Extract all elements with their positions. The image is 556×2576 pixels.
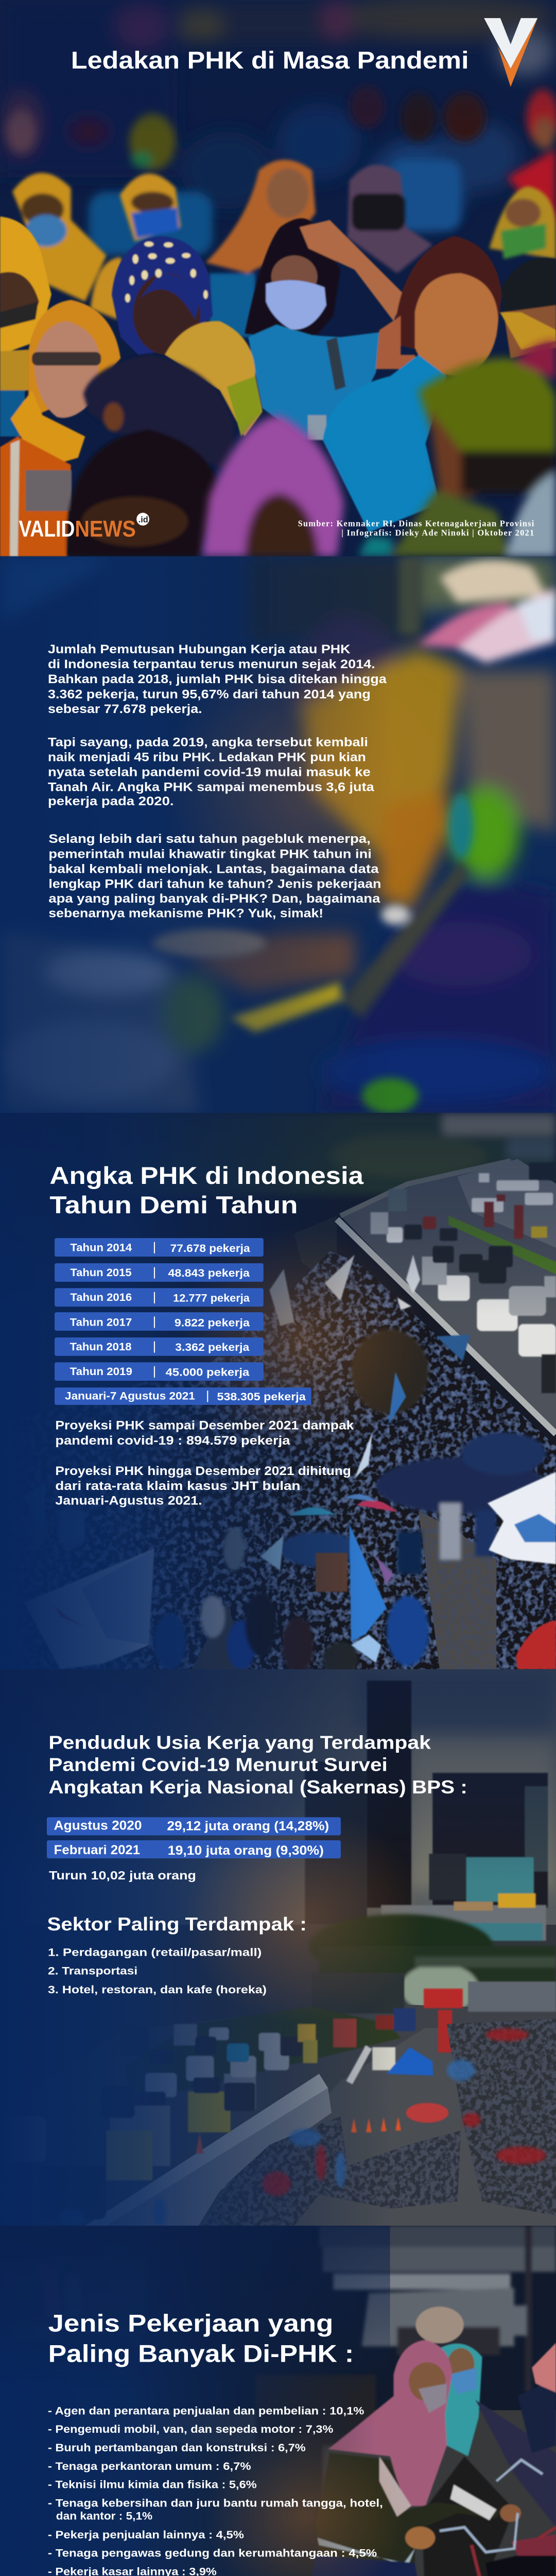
row: 2018: 3.362 pekerja — [175, 1341, 249, 1353]
heading: survey: Penduduk Usia Kerja yang Terdampak — [48, 1732, 431, 1753]
intro paragraph 2: naik menjadi 45 ribu PHK. Ledakan PHK pun kian — [48, 750, 366, 764]
row: 2016: 12.777 pekerja — [173, 1292, 250, 1304]
row: 2021 — [55, 1387, 311, 1405]
panel: working-age population affected — [0, 1669, 556, 2226]
photo: labor march beside toll road — [0, 1113, 556, 1677]
logo: VALIDNEWS.id: VALID — [19, 516, 75, 541]
heading: Angka PHK di Indonesia — [49, 1162, 364, 1189]
heading: Jenis Pekerjaan yang — [48, 2310, 333, 2336]
intro paragraph 2: Tanah Air. Angka PHK sampai menembus 3,6 juta — [48, 780, 374, 794]
row: 2019: 45.000 pekerja — [166, 1366, 249, 1378]
projection note: Proyeksi PHK sampai Desember 2021 dampak — [55, 1418, 354, 1432]
intro paragraph 3: sebenarnya mekanisme PHK? Yuk, simak! — [48, 906, 323, 920]
stat bar: Agustus 2020: 29,12 juta orang (14,28%) — [167, 1820, 329, 1834]
title: Ledakan PHK di Masa Pandemi — [71, 47, 469, 74]
intro paragraph 2: pekerja pada 2020. — [48, 794, 174, 808]
row: 2019 — [55, 1362, 264, 1381]
intro paragraph 3: lengkap PHK dari tahun ke tahun? Jenis pekerjaan — [48, 877, 381, 891]
heading: survey — [48, 1732, 467, 1798]
row: 2017: 9.822 pekerja — [175, 1317, 250, 1329]
list: sectors: 2. Transportasi — [48, 1964, 137, 1977]
photo: protest on Jakarta toll road — [0, 1669, 556, 2226]
panel: PHK figures year by year — [0, 1113, 556, 1669]
intro paragraph 1: Bahkan pada 2018, jumlah PHK bisa ditekan hingga — [48, 672, 387, 686]
row: 2015: 48.843 pekerja — [168, 1267, 250, 1279]
list: job types: - Agen dan perantara penjualan dan pembelian : 10,1% — [48, 2404, 364, 2417]
projection method note: Januari-Agustus 2021. — [55, 1494, 202, 1507]
list: job types: - Tenaga pengawas gedung dan kerumahtangaan : 4,5% — [48, 2547, 377, 2560]
heading: sectors: Sektor Paling Terdampak : — [47, 1914, 307, 1935]
projection method note: Proyeksi PHK hingga Desember 2021 dihitung — [55, 1464, 351, 1478]
crowd mass — [0, 1251, 556, 1669]
stat bar: Februari 2021 — [47, 1840, 341, 1858]
heading: Paling Banyak Di-PHK : — [48, 2340, 354, 2367]
intro paragraph 2: nyata setelah pandemi covid-19 mulai masuk ke — [48, 765, 371, 779]
row: 2021: Januari-7 Agustus 2021 — [65, 1390, 195, 1402]
intro paragraph 3: pemerintah mulai khawatir tingkat PHK tahun ini — [48, 847, 372, 861]
row: 2014: Tahun 2014 — [70, 1242, 132, 1254]
list: job types — [48, 2404, 383, 2576]
projection method note — [55, 1464, 351, 1507]
logo: VALIDNEWS.id: .id — [138, 515, 148, 524]
list: job types: - Pekerja penjualan lainnya : 4,5% — [48, 2529, 244, 2541]
row: 2017 — [55, 1312, 264, 1331]
heading: survey: Angkatan Kerja Nasional (Sakernas) BPS : — [48, 1777, 467, 1798]
stat bar: Agustus 2020: Agustus 2020 — [54, 1819, 142, 1833]
intro paragraph 1: sebesar 77.678 pekerja. — [48, 702, 202, 716]
source credit: | Infografis: Dieky Ade Ninoki | Oktober 2021 — [341, 528, 534, 537]
intro paragraph 2: Tapi sayang, pada 2019, angka tersebut kembali — [48, 735, 368, 749]
panel: cover crowd photo with title — [0, 0, 556, 556]
heading: survey: Pandemi Covid-19 Menurut Survei — [48, 1755, 388, 1775]
decline note: Turun 10,02 juta orang — [49, 1869, 196, 1882]
row: 2015 — [55, 1263, 264, 1282]
list: job types: - Pengemudi mobil, van, dan sepeda motor : 7,3% — [48, 2423, 333, 2435]
heading: Tahun Demi Tahun — [49, 1192, 298, 1218]
intro paragraph 3: bakal kembali melonjak. Lantas, bagaimana data — [48, 862, 379, 876]
row: 2019: Tahun 2019 — [70, 1365, 132, 1378]
list: sectors: 3. Hotel, restoran, dan kafe (horeka) — [48, 1984, 267, 1996]
row: 2018 — [55, 1337, 264, 1356]
table: PHK per year — [55, 1238, 311, 1405]
row: 2014: 77.678 pekerja — [170, 1242, 250, 1255]
intro paragraph 1 — [48, 642, 387, 716]
list: sectors: 1. Perdagangan (retail/pasar/mall) — [48, 1946, 262, 1959]
list: job types: - Tenaga perkantoran umum : 6,7% — [48, 2460, 251, 2472]
heading — [48, 2310, 354, 2367]
row: 2021: 538.305 pekerja — [217, 1391, 306, 1403]
intro paragraph 3: apa yang paling banyak di-PHK? Dan, bagaimana — [48, 892, 380, 906]
list: job types: - Teknisi ilmu kimia dan fisika : 5,6% — [48, 2479, 257, 2491]
intro paragraph 1: Jumlah Pemutusan Hubungan Kerja atau PHK — [48, 642, 351, 656]
photo: crowd of masked workers — [0, 0, 556, 556]
list: sectors — [48, 1946, 267, 1996]
intro paragraph 1: 3.362 pekerja, turun 95,67% dari tahun 2014 yang — [48, 688, 371, 702]
heading — [49, 1162, 364, 1218]
row: 2016 — [55, 1288, 264, 1307]
photo: blurred market vendor — [0, 556, 556, 1113]
source credit: Sumber: Kemnaker RI, Dinas Ketenagakerjaan Provinsi — [298, 518, 534, 528]
row: 2017: Tahun 2017 — [70, 1316, 132, 1328]
row: 2018: Tahun 2018 — [70, 1341, 132, 1353]
intro paragraph 3 — [48, 832, 381, 920]
projection note — [55, 1418, 354, 1448]
logo: VALIDNEWS.id: NEWS — [75, 516, 136, 541]
list: job types: - Tenaga kebersihan dan juru bantu rumah tangga, hotel, — [48, 2497, 383, 2510]
row: 2015: Tahun 2015 — [70, 1266, 132, 1279]
intro paragraph 2 — [48, 735, 374, 808]
list: job types: dan kantor : 5,1% — [56, 2510, 152, 2522]
source credit — [298, 518, 534, 537]
list: job types: - Buruh pertambangan dan konstruksi : 6,7% — [48, 2442, 306, 2454]
projection method note: dari rata-rata klaim kasus JHT bulan — [55, 1479, 300, 1493]
stat bar: Februari 2021: 19,10 juta orang (9,30%) — [168, 1844, 324, 1858]
intro paragraph 3: Selang lebih dari satu tahun pagebluk menerpa, — [48, 832, 371, 846]
stat bar: Februari 2021: Februari 2021 — [54, 1843, 140, 1857]
photo: women walking bicycles — [0, 2226, 556, 2576]
row: 2014 — [55, 1238, 264, 1257]
logo: V mark — [484, 18, 537, 87]
projection note: pandemi covid-19 : 894.579 pekerja — [55, 1434, 290, 1448]
intro paragraph 1: di Indonesia terpantau terus menurun sejak 2014. — [48, 657, 375, 671]
protest crowd — [59, 2019, 556, 2226]
panel: introduction text over blurred photo — [0, 556, 556, 1113]
stat bar: Agustus 2020 — [47, 1817, 341, 1835]
logo: VALIDNEWS.id — [19, 513, 149, 541]
panel: jobs most affected — [0, 2226, 556, 2576]
row: 2016: Tahun 2016 — [70, 1291, 132, 1303]
